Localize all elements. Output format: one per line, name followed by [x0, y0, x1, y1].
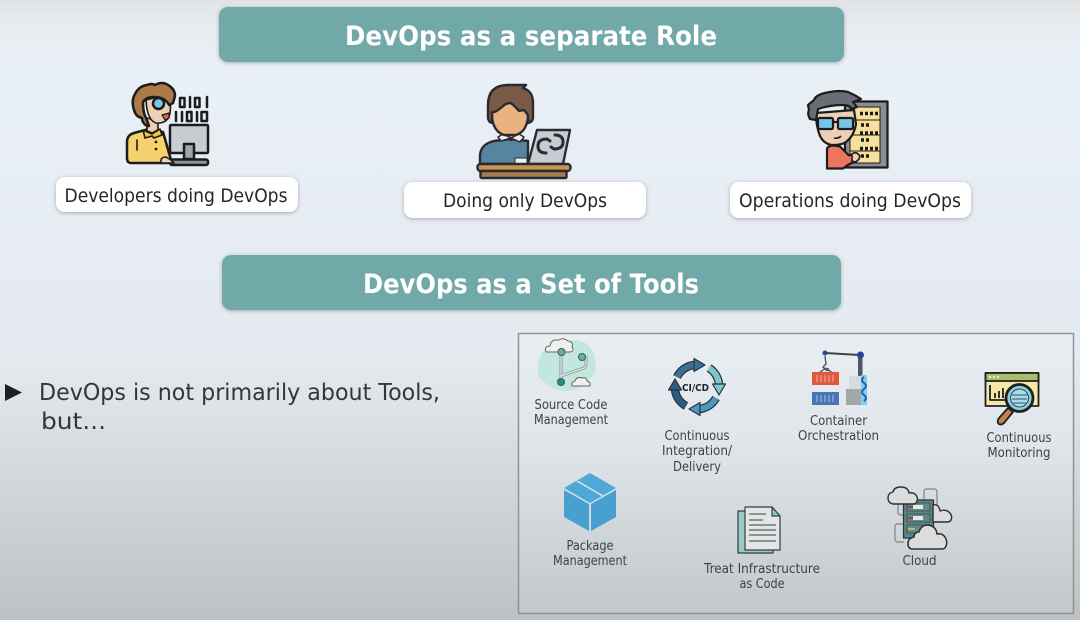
label: Developers doing DevOps: Developers doing DevOps	[64, 185, 288, 207]
label: Treat Infrastructure as Code: as Code	[740, 577, 784, 592]
icon: CI/CD cycle	[668, 358, 726, 416]
label: Continuous Monitoring: Monitoring	[988, 446, 1050, 461]
label: Doing only DevOps: Doing only DevOps	[443, 190, 607, 212]
icon: container crane	[812, 350, 867, 405]
icon: monitoring magnifier	[986, 373, 1038, 424]
label: Treat Infrastructure as Code	[703, 562, 820, 592]
icon: person with laptop at desk	[478, 85, 570, 178]
label: Developers doing DevOps	[56, 177, 298, 212]
heading: DevOps as a separate Role	[219, 7, 844, 62]
bullet text: DevOps is not primarily about Tools: but...	[41, 409, 106, 435]
icon: document	[738, 507, 780, 553]
label: Continuous Integration/Delivery: Integration/	[662, 444, 733, 459]
label: Cloud: Cloud	[902, 554, 936, 569]
label: Container Orchestration	[798, 414, 879, 444]
bullet text: DevOps is not primarily about Tools	[5, 380, 440, 435]
panel: tools	[518, 334, 1074, 614]
heading: DevOps as a separate Role: DevOps as a separate Role	[345, 21, 717, 52]
label: Source Code Management	[534, 398, 608, 428]
label: Doing only DevOps	[404, 182, 646, 218]
label: Container Orchestration: Container	[810, 414, 868, 429]
label: Operations doing DevOps: Operations doing DevOps	[739, 190, 961, 212]
label: Source Code Management: Source Code	[534, 398, 608, 413]
label: Continuous Integration/Delivery	[662, 429, 733, 475]
heading: DevOps as a Set of Tools	[222, 255, 841, 310]
icon: developer at computer	[127, 83, 208, 165]
label: Continuous Integration/Delivery: Delivery	[673, 460, 721, 475]
label: Continuous Monitoring	[986, 431, 1052, 461]
label: Package Management	[553, 539, 627, 569]
label: Continuous Monitoring: Continuous	[986, 431, 1052, 446]
icon: CI/CD cycle: CI/CD	[682, 383, 709, 394]
heading: DevOps as a Set of Tools: DevOps as a Set of Tools	[363, 269, 699, 300]
label: Continuous Integration/Delivery: Continuous	[664, 429, 730, 444]
icon: cloud servers	[888, 487, 952, 549]
label: Package Management: Package	[566, 539, 614, 554]
label: Source Code Management: Management	[534, 413, 608, 428]
icon: package box	[564, 473, 616, 531]
label: Treat Infrastructure as Code: Treat Infrastructure	[703, 562, 820, 577]
icon: source code management	[538, 339, 595, 391]
bullet text: DevOps is not primarily about Tools: DevOps is not primarily about Tools,	[39, 380, 440, 406]
icon: operator with server rack	[808, 91, 888, 168]
label: Package Management: Management	[553, 554, 627, 569]
label: Container Orchestration: Orchestration	[798, 429, 879, 444]
label: Operations doing DevOps	[730, 182, 971, 218]
